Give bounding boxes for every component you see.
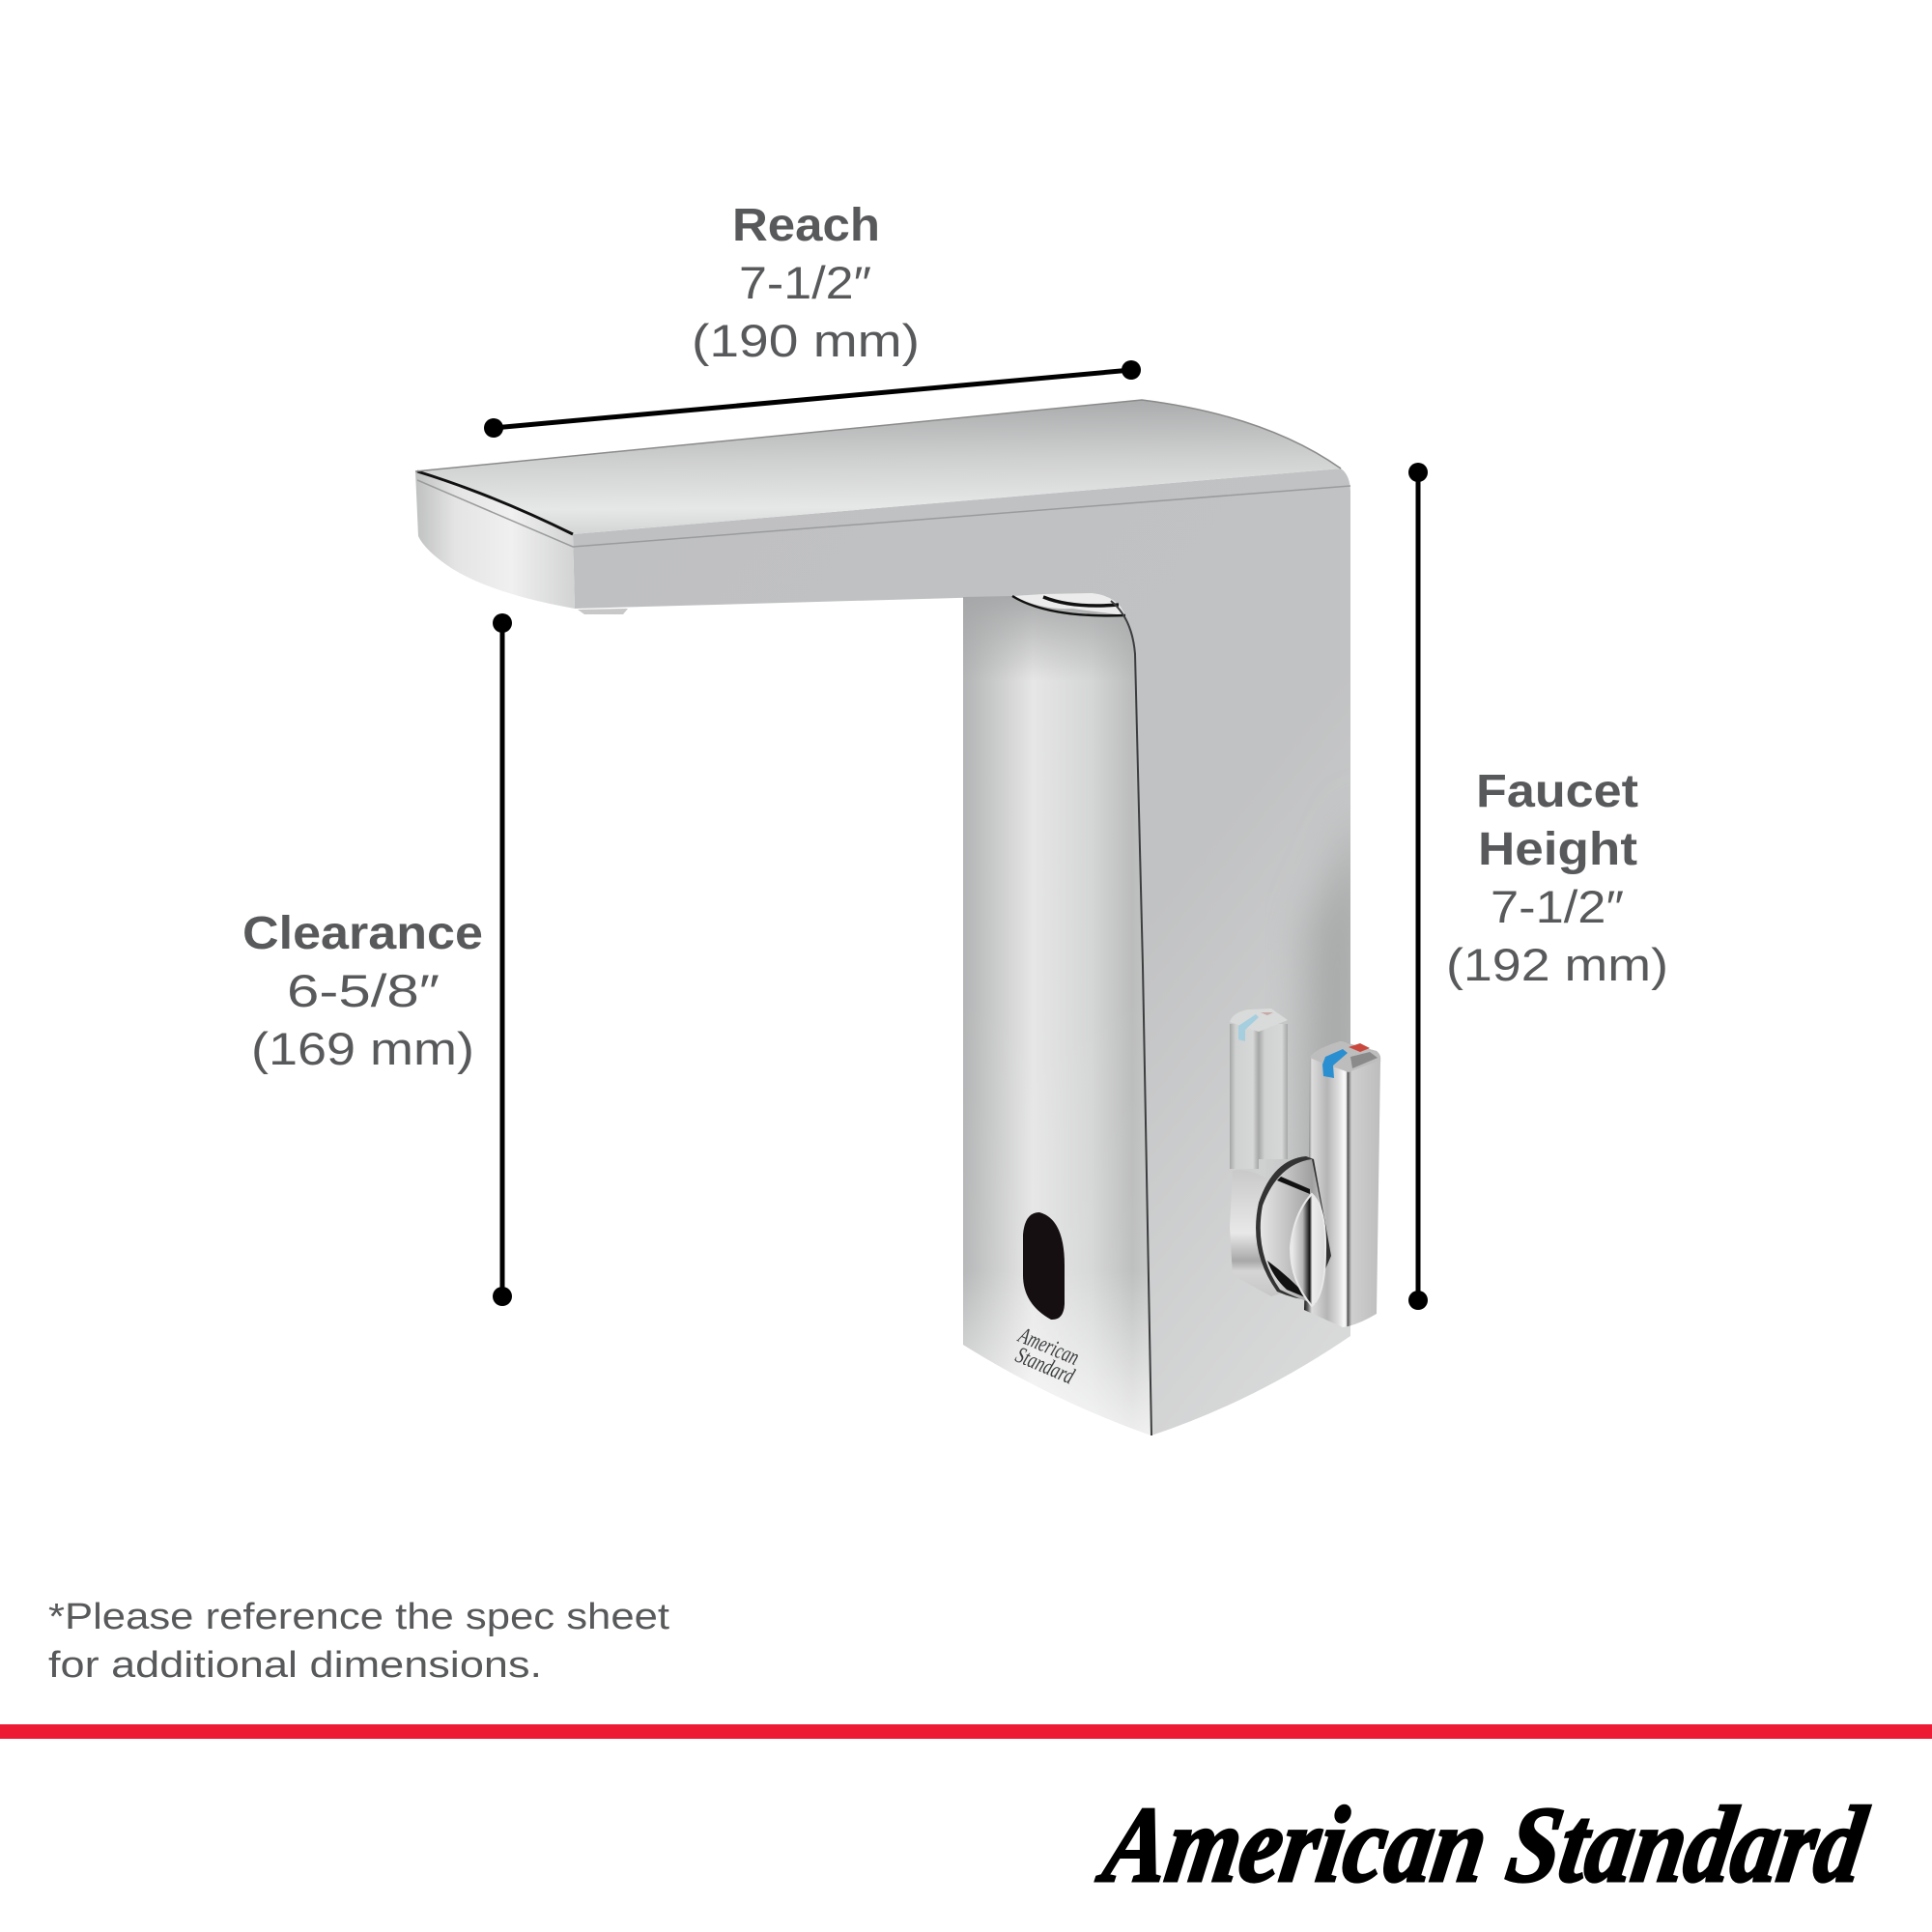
- reach label: [692, 200, 920, 366]
- clearance label: Clearance: [242, 908, 483, 959]
- divider edge: [1111, 601, 1151, 1435]
- sensor window: [1023, 1212, 1065, 1320]
- clearance label: [242, 908, 483, 1074]
- spout back outline: [415, 400, 1341, 471]
- faucet height label: [1446, 766, 1668, 990]
- reach label: Reach: [732, 200, 880, 251]
- faucet height label: 7-1/2″: [1491, 881, 1624, 932]
- footnote: *Please reference the spec sheet: [48, 1597, 670, 1637]
- clearance label: 6-5/8″: [287, 965, 440, 1016]
- reach label: 7-1/2″: [739, 257, 871, 308]
- front lever handle: [1304, 1041, 1380, 1327]
- faucet height dimension line: [1408, 463, 1428, 1310]
- spout end face: [415, 471, 575, 609]
- reach dimension line: [484, 360, 1141, 438]
- clearance dimension line: [493, 613, 512, 1306]
- faucet logo: Standard: [1011, 1343, 1078, 1390]
- faucet side face and spout front face: [573, 469, 1350, 1435]
- column top shading: [963, 596, 1133, 669]
- red divider bar: [0, 1724, 1932, 1739]
- spout edge line: [417, 471, 573, 534]
- spout seam line: [417, 480, 1350, 547]
- column lower highlight: [963, 966, 1151, 1435]
- reach label: (190 mm): [692, 315, 920, 366]
- side face darker edge: [1283, 833, 1350, 1165]
- knob: [1256, 1156, 1331, 1306]
- faucet logo: [1007, 1322, 1086, 1390]
- footnote: for additional dimensions.: [48, 1645, 542, 1686]
- faucet height label: Height: [1478, 824, 1637, 875]
- underside collar: [1012, 593, 1125, 615]
- faucet column front face: [963, 594, 1151, 1435]
- rear handle: [1230, 1009, 1294, 1296]
- footnote: [48, 1597, 670, 1686]
- faucet illustration: [415, 400, 1380, 1435]
- spout top surface: [415, 400, 1341, 534]
- faucet height label: (192 mm): [1446, 939, 1668, 990]
- nozzle: [578, 609, 628, 614]
- faucet logo: American: [1013, 1322, 1083, 1371]
- clearance label: (169 mm): [251, 1023, 474, 1074]
- faucet height label: Faucet: [1476, 766, 1638, 817]
